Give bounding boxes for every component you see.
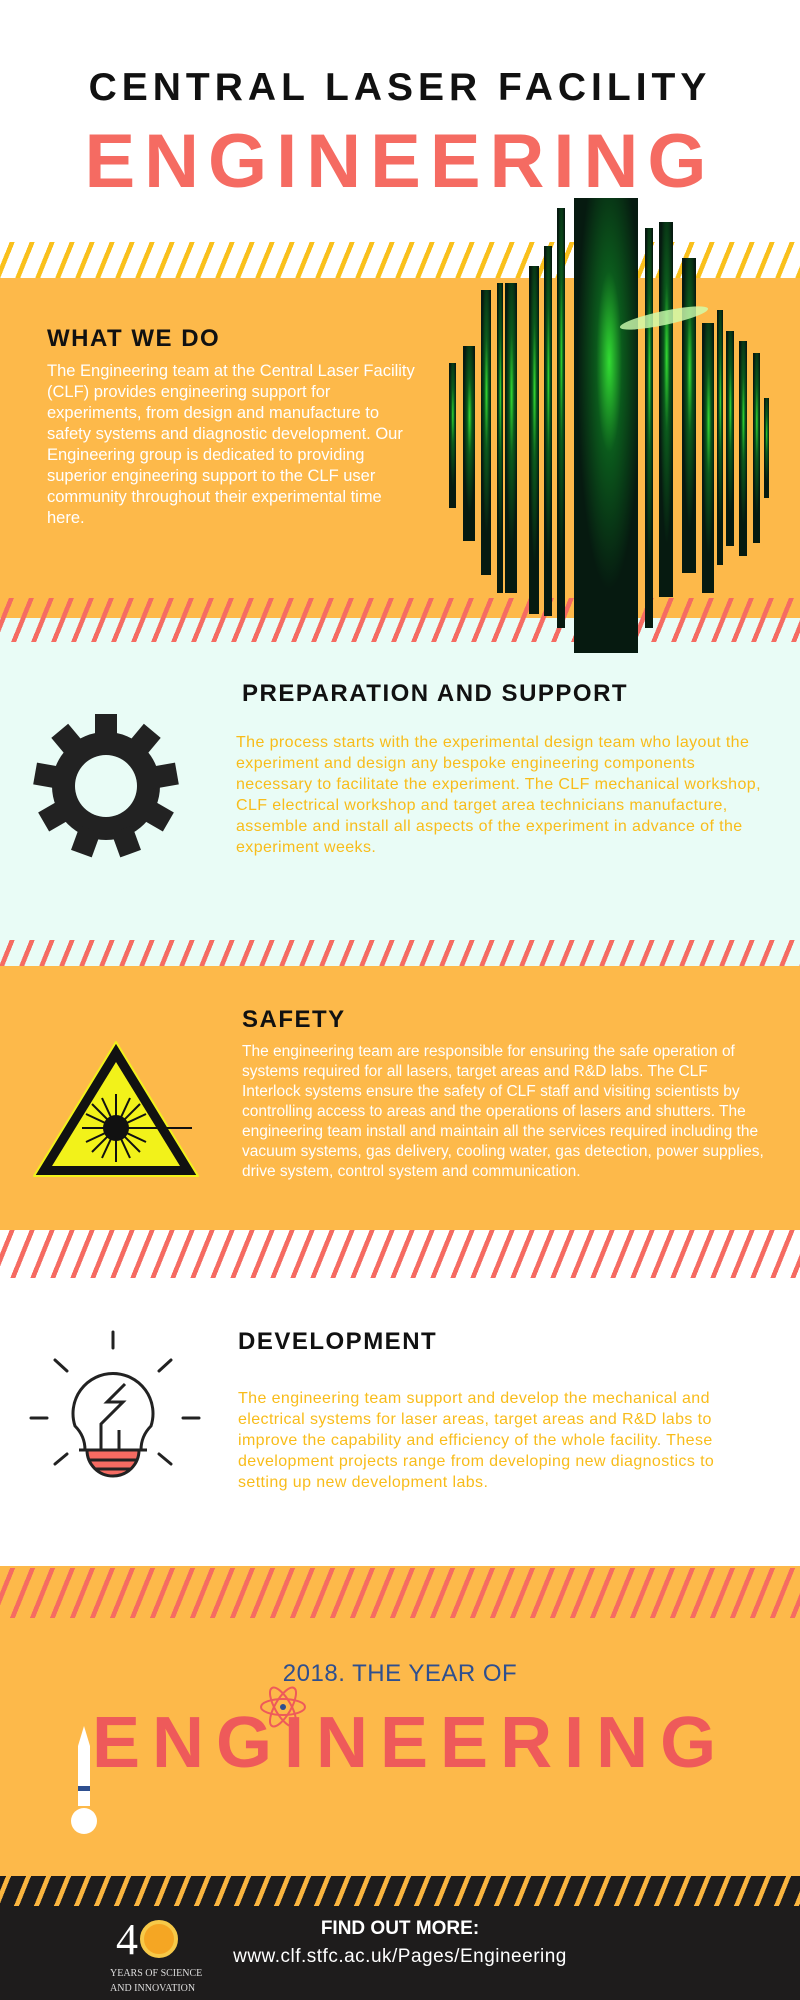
heading: engineering logo: ENGINEERING bbox=[92, 1703, 728, 1783]
panel: development bbox=[30, 1328, 714, 1491]
icon: atom bbox=[260, 1686, 306, 1728]
logo: 40 years bbox=[110, 1915, 202, 1994]
icon: light bulb bbox=[30, 1330, 200, 1478]
heading: preparation: PREPARATION AND SUPPORT bbox=[242, 680, 628, 707]
title: CENTRAL LASER FACILITY bbox=[89, 66, 711, 109]
panel: preparation and support bbox=[0, 618, 800, 966]
panel: year of engineering bbox=[0, 1566, 800, 1876]
heading: engineering: ENGINEERING bbox=[84, 119, 716, 204]
panel: what we do bbox=[0, 278, 800, 618]
heading: what we do: WHAT WE DO bbox=[47, 325, 220, 352]
panel: safety bbox=[0, 966, 800, 1230]
icon: gear bbox=[33, 714, 179, 858]
icon: laser warning bbox=[33, 1041, 199, 1177]
text: preparation: The process starts with the experimental design team who layout the experiment and design any bespoke engineering components necessary to facilitate the experiment. The CLF mechanical workshop, CLF electrical workshop and target area technicians manufacture, assemble and install all aspects of the experiment in advance of the experiment weeks. bbox=[236, 734, 761, 856]
text: url: www.clf.stfc.ac.uk/Pages/Engineering bbox=[233, 1946, 567, 1967]
text: 2018 the year of: 2018. THE YEAR OF bbox=[283, 1660, 517, 1687]
heading: safety: SAFETY bbox=[242, 1006, 346, 1033]
text: development: The engineering team support and develop the mechanical and electrical systems for laser areas, target areas and R&D labs to improve the capability and efficiency of the whole facility. These development projects range from developing new diagnostics to setting up new development labs. bbox=[238, 1390, 714, 1491]
footer bbox=[0, 1876, 800, 2000]
text: what we do: The Engineering team at the Central Laser Facility (CLF) provides engineering support for experiments, from design and manufacture to safety systems and diagnostic development. Our Engineering group is dedicated to providing superior engineering support to the CLF user community throughout their experimental time here. bbox=[47, 362, 415, 527]
logo: 40 years: AND INNOVATION bbox=[110, 1983, 195, 1994]
heading: development: DEVELOPMENT bbox=[238, 1328, 437, 1355]
text: safety: The engineering team are responsible for ensuring the safe operation of systems required for all lasers, target areas and R&D labs. The CLF Interlock systems ensure the safety of CLF staff and visiting scientists by controlling access to areas and the operations of lasers and shutters. The engineering team install and maintain all the services required including the vacuum systems, gas delivery, cooling water, gas detection, power supplies, drive system, control system and communication. bbox=[242, 1043, 764, 1180]
text: find out more: FIND OUT MORE: bbox=[321, 1918, 479, 1939]
logo: 40 years: YEARS OF SCIENCE bbox=[110, 1968, 202, 1979]
decorative stripes bbox=[0, 242, 800, 278]
icon: rocket bbox=[71, 1726, 97, 1834]
logo: 40 years: 4 bbox=[116, 1915, 138, 1964]
image: laser bars bbox=[449, 198, 769, 653]
